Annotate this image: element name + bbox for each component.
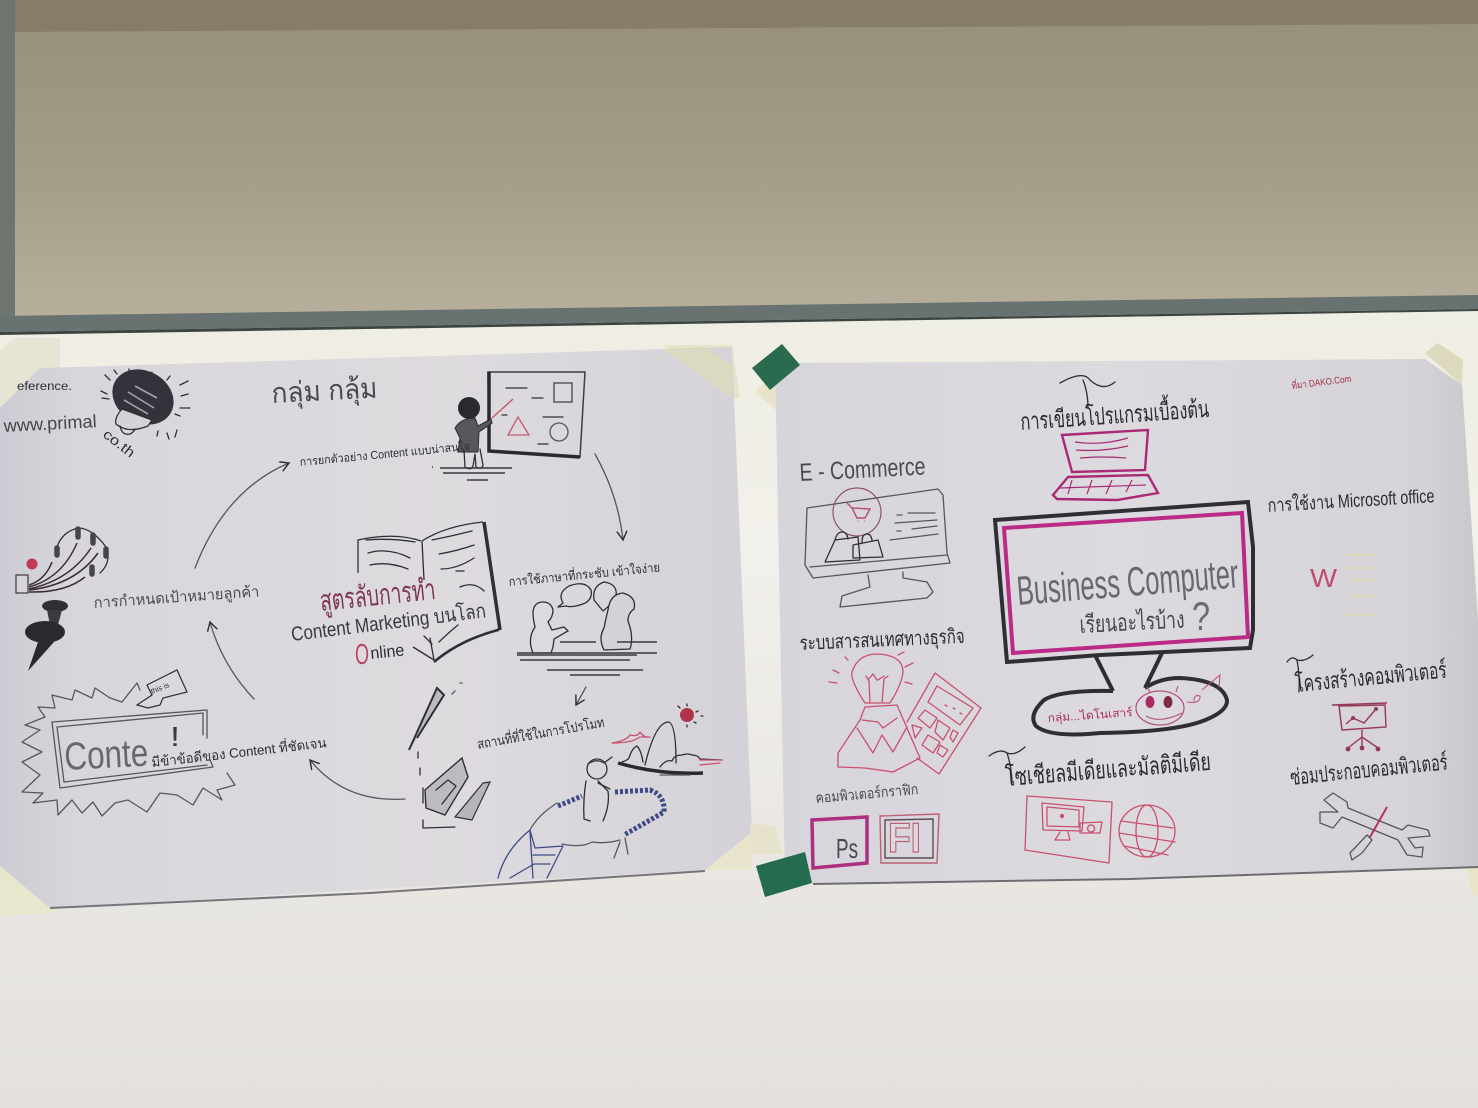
icon: green tape bottom — [756, 852, 812, 897]
tape corners — [0, 338, 752, 916]
icon: word document — [1310, 555, 1378, 615]
arrow: to target — [210, 622, 254, 699]
icon: content burst — [22, 670, 235, 816]
text: small pink note: ที่มา DAKO.Com — [1291, 372, 1352, 392]
icon: word document: W — [1310, 563, 1337, 593]
icon: content burst: ! — [170, 721, 180, 752]
icon: teacher at whiteboard — [432, 372, 585, 480]
main monitor: business computer: ? — [1192, 595, 1210, 639]
main monitor: business computer: Business Computer — [1015, 550, 1240, 614]
text: distinct advantages: มีข้าข้อดีของ Content ที่ชัดเจน — [150, 733, 327, 770]
group label and mascot — [1047, 675, 1220, 725]
heading: e-commerce: E - Commerce — [799, 452, 926, 487]
icon: content burst: this is — [149, 680, 171, 696]
arrow: to language — [595, 454, 623, 540]
tape corners — [750, 343, 1478, 897]
reference text: www.primal — [2, 411, 97, 436]
reference text: eference. — [17, 381, 72, 393]
arrow: to advantages — [310, 760, 405, 799]
icon: wrench and screwdriver — [1320, 793, 1430, 860]
panel: right poster — [750, 343, 1478, 897]
icon: laptop and pen — [409, 683, 490, 828]
icon: push pin — [25, 600, 68, 671]
icon: green tape top — [752, 344, 800, 390]
icon: mountains and sun — [612, 704, 722, 775]
swash: structure heading — [1287, 655, 1313, 692]
text: location: สถานที่ที่ใช้ในการโปรโมท — [476, 713, 606, 752]
icon: flash box: FI — [888, 814, 921, 861]
text: target customer: การกำหนดเป้าหมายลูกค้า — [93, 583, 260, 612]
title: content marketing secrets: สูตรลับการทำ — [318, 574, 437, 619]
icon: flash box — [880, 814, 939, 863]
heading: information systems: ระบบสารสนเทศทางธุรกิจ — [799, 626, 965, 656]
icon: presentation chart — [1332, 703, 1387, 751]
icon: multimedia screen — [1025, 796, 1112, 863]
tape top right overlay — [663, 347, 732, 398]
icon: light bulb — [101, 358, 190, 439]
icon: people talking — [517, 582, 657, 675]
text: content example: การยกตัวอย่าง Content แบบน่าสนใจ — [299, 440, 471, 469]
title: content marketing secrets: nline — [369, 641, 405, 663]
icon: programming laptop — [1053, 430, 1158, 500]
arrow: to content example — [195, 463, 289, 568]
title: content marketing secrets — [290, 574, 487, 671]
swash: social heading — [989, 747, 1025, 785]
reference text — [2, 381, 138, 461]
icon: target customers network — [16, 528, 108, 593]
main monitor: business computer: เรียนอะไรบ้าง — [1079, 606, 1185, 639]
arrow: to location — [576, 687, 586, 705]
panel: left poster — [0, 338, 752, 916]
heading: social and multimedia: โซเชียลมีเดียและมัลติมีเดีย — [1004, 747, 1212, 792]
title: content marketing secrets: O — [355, 639, 369, 671]
icon: traveller on bridge — [498, 757, 664, 878]
text: friendly language: การใช้ภาษาที่กระชับ เข้าใจง่าย — [508, 558, 661, 589]
icon: photoshop box — [812, 817, 867, 868]
icon: open book — [358, 522, 500, 662]
icon: e-commerce monitor — [805, 488, 950, 607]
heading: group name: กลุ่ม กลุ้ม — [271, 372, 378, 411]
icon: content burst: Conte — [63, 732, 149, 779]
main monitor: business computer — [995, 502, 1253, 734]
title: content marketing secrets: Content Marketing บนโลก — [290, 599, 487, 646]
text: computer graphics: คอมพิวเตอร์กราฟิก — [815, 781, 919, 807]
icon: globe — [1119, 805, 1175, 857]
icon: bulb and document — [829, 652, 981, 774]
group label and mascot: กลุ่ม...ไดโนเสาร์ — [1047, 705, 1133, 725]
reference text: co.th — [100, 426, 138, 461]
swash: programming heading — [1060, 376, 1115, 408]
heading: programming: การเขียนโปรแกรมเบื้องต้น — [1019, 391, 1210, 436]
icon: photoshop box: Ps — [836, 833, 858, 864]
